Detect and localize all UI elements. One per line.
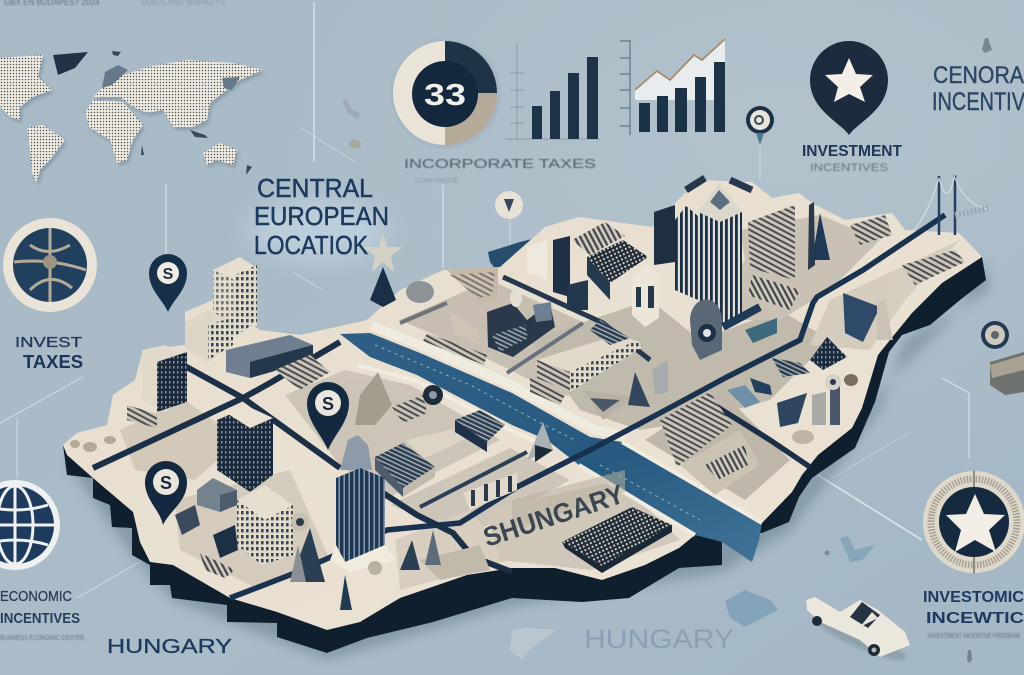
area and bar chart bbox=[620, 39, 725, 135]
icon: left medallion bbox=[3, 218, 97, 312]
pin mid: S bbox=[322, 394, 334, 414]
australia bbox=[203, 143, 237, 165]
north central buildings bbox=[406, 178, 965, 420]
dark building cluster bbox=[487, 303, 555, 357]
hatched box bbox=[375, 443, 435, 488]
dark window tower bbox=[142, 345, 187, 412]
beige tower bbox=[213, 257, 257, 340]
gray low box bbox=[226, 335, 313, 378]
bar chart bbox=[505, 43, 600, 140]
river bank highlights bbox=[372, 326, 625, 436]
statue bbox=[355, 372, 392, 425]
back river lobe bbox=[488, 235, 548, 275]
long building bbox=[537, 333, 643, 387]
small figure mark bbox=[982, 38, 992, 53]
north-east buildings bbox=[660, 293, 893, 495]
star medallion bbox=[923, 471, 1024, 573]
pin low: S bbox=[160, 473, 172, 493]
label: invest taxes: TAXES bbox=[23, 352, 83, 372]
pin mid bbox=[307, 382, 349, 450]
pin low bbox=[145, 461, 187, 525]
label: investomic incentic: INVESTOMIC bbox=[923, 589, 1024, 606]
car bbox=[806, 597, 910, 667]
hungary isometric map bbox=[63, 178, 990, 660]
label: economic incentives: ECONOMIC bbox=[0, 588, 72, 605]
white map pin top bbox=[495, 191, 523, 219]
label: cenora incentive bbox=[932, 62, 1024, 116]
south america bbox=[27, 125, 65, 183]
label: investomic incentic bbox=[923, 589, 1024, 640]
district texture bbox=[120, 215, 960, 590]
gray box bbox=[583, 390, 633, 420]
label: invest taxes bbox=[15, 334, 83, 372]
label: investment bbox=[802, 143, 902, 174]
label: corporate taxes bbox=[404, 156, 596, 185]
tower dark bbox=[217, 408, 273, 492]
small mounds bbox=[70, 436, 116, 452]
pillars bbox=[463, 473, 517, 510]
donut chart: 33 bbox=[392, 40, 500, 148]
label: central european location: LOCATIOK bbox=[254, 230, 369, 260]
faint header text bbox=[4, 0, 225, 7]
label: central european location: EUROPEAN bbox=[254, 201, 389, 231]
label: central european location: CENTRAL bbox=[257, 173, 373, 203]
continents shadow bbox=[2, 58, 265, 186]
donut value: 33 bbox=[424, 77, 466, 112]
south block with dotted building bbox=[480, 470, 672, 573]
map side wall bbox=[63, 257, 986, 653]
world map bbox=[0, 51, 265, 186]
label: investment: INVESTMENT bbox=[802, 143, 902, 160]
tan block bbox=[447, 267, 498, 303]
gray box bbox=[197, 478, 237, 512]
eurasia bbox=[93, 60, 263, 127]
greenland bbox=[53, 52, 88, 75]
main tower bbox=[698, 205, 742, 325]
north america bbox=[0, 55, 52, 120]
decorative blue splashes bbox=[510, 536, 972, 663]
dark slim tower bbox=[553, 236, 570, 297]
white small tower bbox=[632, 263, 659, 327]
dark block bbox=[455, 410, 505, 442]
map top surface bbox=[63, 180, 982, 630]
dark building behind bbox=[654, 205, 675, 265]
hatched blocks bbox=[748, 205, 795, 280]
central tower, blue bbox=[330, 435, 395, 572]
river sparkle text marks bbox=[375, 345, 700, 520]
round shrub cluster bbox=[406, 281, 434, 303]
label: economic incentives bbox=[0, 588, 84, 642]
teal block bbox=[745, 318, 777, 343]
hatch band bbox=[423, 333, 487, 365]
label: invest taxes: INVEST bbox=[15, 334, 82, 351]
label: investomic incentic: INCEWTIC bbox=[926, 610, 1024, 627]
bridge bbox=[912, 175, 990, 235]
icon: location pin S bbox=[149, 254, 187, 312]
roads bbox=[93, 215, 945, 598]
right icons bbox=[981, 321, 1024, 395]
camera tower bbox=[690, 299, 722, 360]
map pins bbox=[145, 382, 349, 525]
label: central european location bbox=[248, 173, 389, 260]
small ghost pin marks bbox=[342, 100, 361, 149]
north-west buildings bbox=[70, 257, 352, 610]
icon: globe bbox=[0, 480, 60, 570]
label: economic incentives: BUSINESS ECONOMIC CENTER bbox=[0, 635, 84, 642]
low beige block bbox=[185, 310, 233, 362]
africa bbox=[85, 100, 143, 163]
center south block details bbox=[275, 355, 553, 580]
label: hungary bottom left: HUNGARY bbox=[107, 636, 232, 658]
islands bbox=[112, 51, 252, 175]
label: corporate taxes: INCORPORATE TAXES bbox=[404, 156, 596, 171]
label: hungary faint: HUNGARY bbox=[584, 624, 734, 654]
river bbox=[340, 333, 762, 562]
label: investment: INCENTIVES bbox=[810, 162, 888, 174]
pale window block bbox=[237, 485, 293, 565]
label: corporate taxes: CORPORATE bbox=[415, 178, 459, 185]
star on cone bbox=[363, 233, 403, 307]
map shadow bbox=[63, 262, 990, 660]
small dark blocks bbox=[213, 525, 238, 558]
secondary tower bbox=[675, 206, 698, 300]
beige rods bbox=[405, 427, 470, 458]
icon: big star pin bbox=[810, 41, 888, 135]
icon: small pin bbox=[746, 106, 774, 145]
white building bbox=[527, 240, 547, 280]
label: economic incentives: INCENTIVES bbox=[0, 610, 80, 627]
small hatched bbox=[392, 395, 427, 423]
lattice block bbox=[587, 240, 648, 283]
gray cone on bank bbox=[527, 422, 553, 460]
cones bbox=[290, 528, 325, 582]
icon: location pin S: S bbox=[163, 266, 174, 283]
map label: hungary: SHUNGARY bbox=[480, 479, 628, 553]
